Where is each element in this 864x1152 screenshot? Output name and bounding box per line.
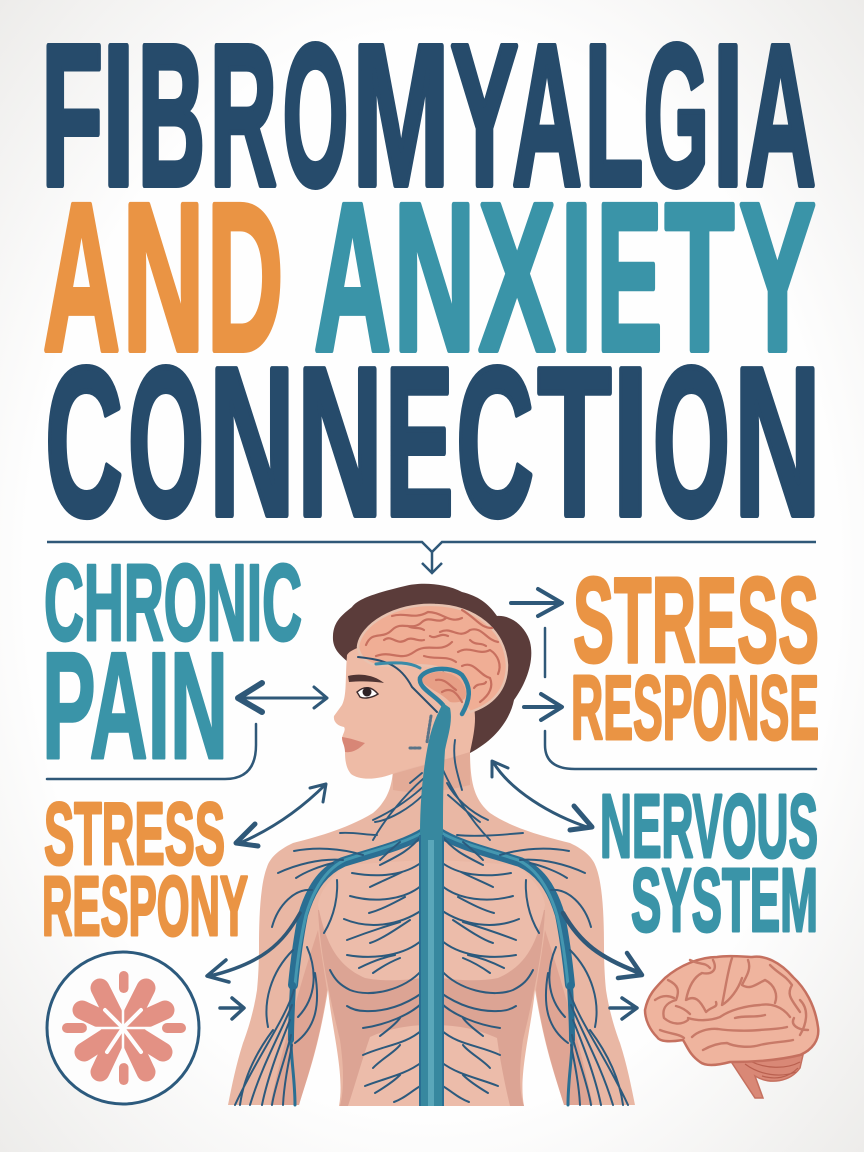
arrows xyxy=(207,589,642,1019)
title word: Anxiety: E xyxy=(596,159,662,395)
spinal cord xyxy=(420,703,451,1106)
title line: Connection: N xyxy=(209,323,295,560)
title word: And: D xyxy=(207,159,283,395)
arrow: to Stress top xyxy=(511,589,562,616)
arrow: nerve to flower circle xyxy=(207,913,300,982)
brain folds xyxy=(655,958,808,1050)
arrow: right to brain xyxy=(610,998,637,1019)
arrow: Stress Respony to shoulder xyxy=(236,784,326,846)
title word: Anxiety: X xyxy=(479,159,555,395)
icon: circle flower xyxy=(47,952,199,1104)
title xyxy=(41,2,821,560)
connector lines xyxy=(47,628,816,779)
title line: Fibromyalgia: M xyxy=(352,2,450,228)
title line: Fibromyalgia: I xyxy=(713,2,744,228)
arm shading xyxy=(270,930,593,1105)
title line: Fibromyalgia: A xyxy=(512,2,582,228)
upper nerves in head xyxy=(358,657,469,748)
label: Chronic Pain: CHRONIC xyxy=(44,542,302,664)
label: Stress Respony (left): RESPONY xyxy=(42,859,248,953)
title line: Fibromyalgia: Y xyxy=(450,2,518,228)
title line: Connection: O xyxy=(128,323,204,560)
label: Stress Respony (left): STRESS xyxy=(44,784,225,883)
abdomen shading xyxy=(318,910,545,1106)
title line: Connection: N xyxy=(297,323,383,560)
cerebellum and stem xyxy=(730,1055,803,1098)
left-side nerves xyxy=(235,832,425,1105)
neck and shoulder nerve branches xyxy=(340,740,523,840)
right-side nerves xyxy=(438,832,628,1105)
arrow: nerve to brain xyxy=(563,913,642,978)
title line: Connection: O xyxy=(653,323,730,560)
title line: Fibromyalgia: G xyxy=(644,2,709,228)
label: Stress Response (right) xyxy=(571,552,819,759)
label: Nervous System xyxy=(600,777,818,951)
title line: Fibromyalgia: I xyxy=(102,2,135,228)
divider with down arrow xyxy=(47,542,816,573)
label: Chronic Pain xyxy=(42,542,302,791)
eye and brow xyxy=(348,675,384,698)
title line: Fibromyalgia: B xyxy=(138,2,205,228)
title line: Fibromyalgia: R xyxy=(210,2,277,228)
arrow: right of circle xyxy=(220,998,244,1019)
body figure xyxy=(228,584,635,1106)
chest and belly highlights xyxy=(318,860,545,1106)
title word: Anxiety: I xyxy=(560,159,593,395)
label: Stress Respony (left) xyxy=(42,784,248,953)
title word: Anxiety: A xyxy=(314,159,391,395)
title word: And: A xyxy=(43,159,120,395)
title word: Anxiety: T xyxy=(665,159,734,395)
title word: And: N xyxy=(122,159,205,395)
arrow: Chronic Pain to head xyxy=(238,683,327,712)
title line: Connection: C xyxy=(45,323,123,560)
title word: Anxiety: N xyxy=(393,159,476,395)
arrow: Nervous System to neck xyxy=(492,761,592,830)
title line: Fibromyalgia: O xyxy=(282,2,348,228)
lips xyxy=(342,737,365,752)
arrow: to Response xyxy=(524,694,562,720)
title line: Connection: T xyxy=(538,323,612,560)
title line: Connection: E xyxy=(385,323,454,560)
title line: Fibromyalgia: F xyxy=(41,2,103,228)
label: Chronic Pain: PAIN xyxy=(42,621,228,791)
skin: neck, torso and arms xyxy=(228,750,635,1106)
title line: Connection: I xyxy=(612,323,649,560)
neck shadow xyxy=(393,752,470,792)
title line: Connection: C xyxy=(456,323,534,560)
hair xyxy=(333,584,531,753)
head: face xyxy=(334,640,475,779)
icon: brain xyxy=(645,956,818,1098)
brain on head xyxy=(358,605,507,712)
title line: Fibromyalgia: L xyxy=(584,2,644,228)
